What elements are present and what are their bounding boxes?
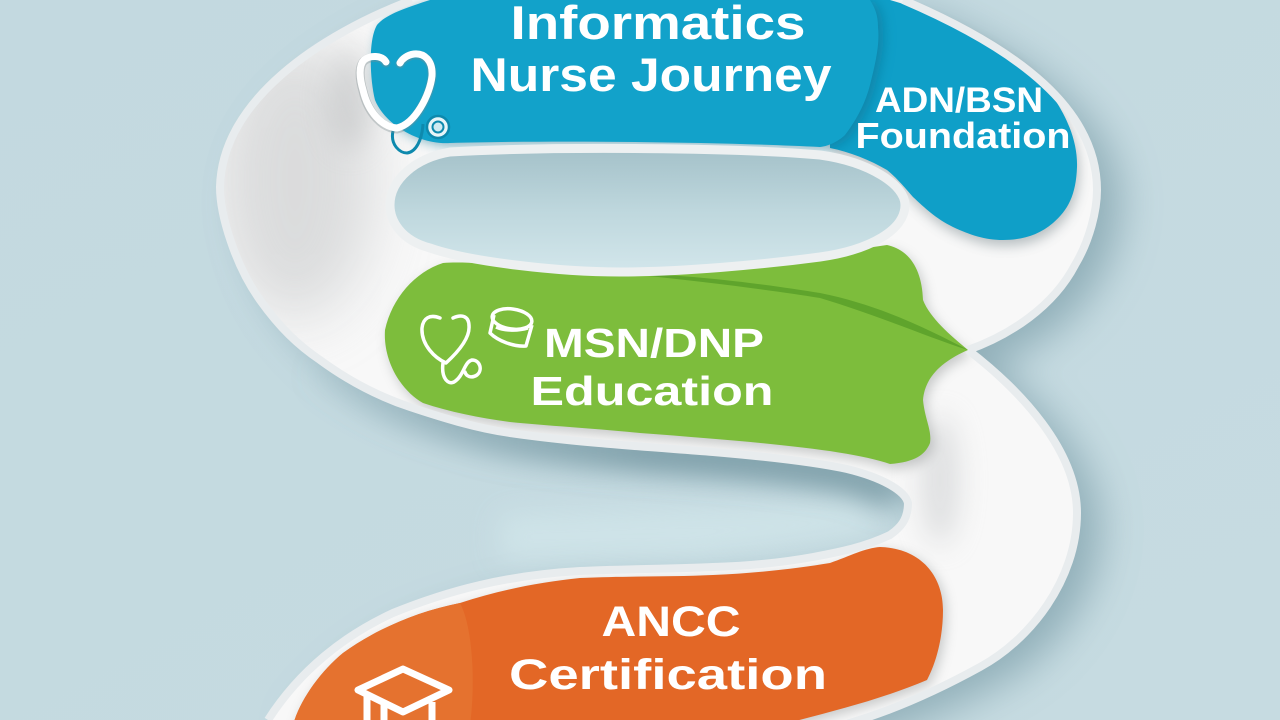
panel: MSN/DNP education — [385, 245, 971, 469]
title segment shadow — [376, 2, 883, 149]
green panel shadow — [388, 250, 971, 469]
inner ribbon opening — [390, 148, 905, 272]
foundation ribbon segment — [830, 0, 1077, 240]
lower opening top shadow — [320, 368, 895, 498]
heading: ANCC certification: Certification — [509, 651, 827, 699]
icon: stethoscope — [360, 54, 449, 153]
heading: MSN/DNP education: Education — [530, 368, 774, 414]
title ribbon segment — [371, 0, 878, 147]
icon: stethoscope — [422, 316, 480, 383]
ribbon outer rim — [220, 0, 1097, 720]
lighter orange fold — [293, 603, 473, 720]
subtitle: ADN/BSN Foundation: ADN/BSN — [875, 81, 1043, 120]
heading: MSN/DNP education — [530, 320, 774, 414]
icon: graduation cap — [358, 669, 449, 720]
ribbon shadow — [244, 14, 1121, 720]
lower opening light area — [500, 505, 885, 560]
title — [470, 0, 832, 101]
infographic canvas — [216, 0, 1142, 720]
green highlight fold — [620, 273, 968, 350]
orange panel shadow — [296, 551, 946, 720]
green panel body — [385, 245, 968, 464]
subtitle: ADN/BSN Foundation: Foundation — [856, 115, 1070, 156]
foundation segment shadow — [832, 6, 1079, 246]
orange panel body — [293, 547, 943, 720]
subtitle: ADN/BSN Foundation — [856, 81, 1070, 156]
white winding ribbon path — [215, 0, 1097, 720]
icon: medicine container — [490, 306, 533, 346]
heading: ANCC certification — [509, 598, 827, 699]
title: Nurse Journey — [470, 48, 832, 101]
heading: ANCC certification: ANCC — [602, 598, 740, 646]
heading: MSN/DNP education: MSN/DNP — [544, 320, 764, 366]
panel: ANCC certification — [293, 547, 946, 720]
panel: informatics nurse journey — [371, 0, 1079, 246]
